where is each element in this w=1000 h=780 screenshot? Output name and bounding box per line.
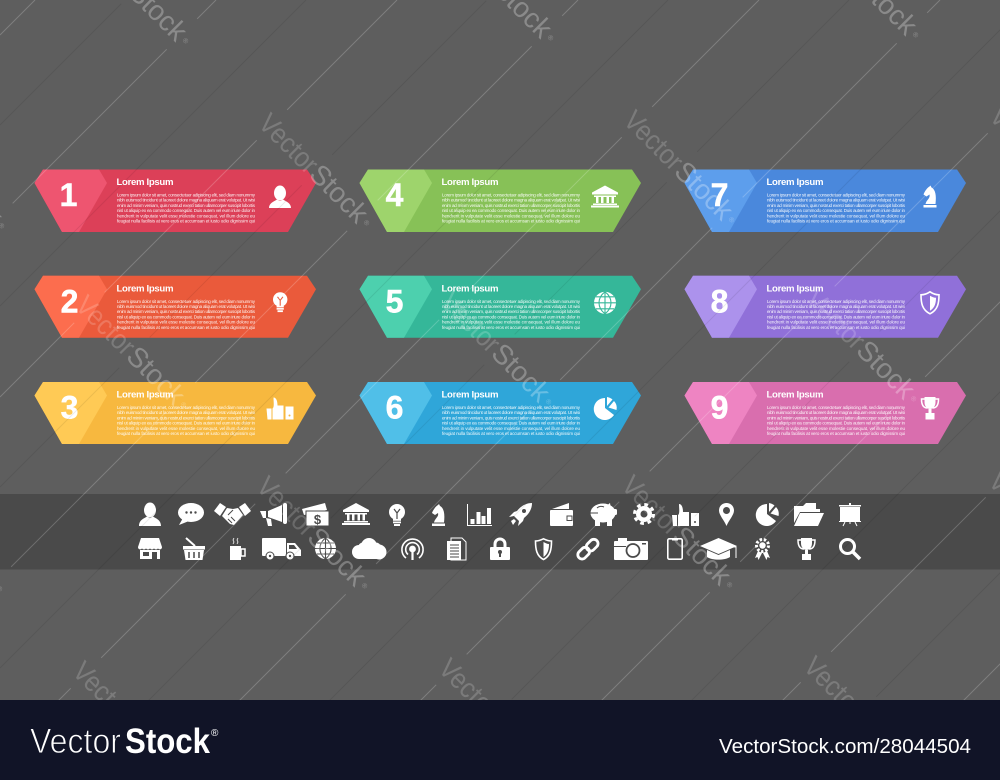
icon: banknotes <box>302 503 329 527</box>
card 7: 7 <box>711 177 728 213</box>
card 3: feugiat nulla facilisis at vero eros et accumsan et iusto odio dignissim qui <box>117 431 255 436</box>
icon: rocket <box>509 503 532 526</box>
card 8: enim ad minim veniam, quis nostrud exerci tation ullamcorper suscipit lobortis <box>767 309 906 314</box>
card 7 <box>684 170 966 232</box>
watermarks: ® <box>179 400 189 410</box>
card 8: Lorem Ipsum <box>766 283 824 294</box>
icon: light bulb <box>389 504 405 526</box>
card 9: nibh euismod tincidunt ut laoreet dolore magna aliquam erat volutpat. Ut wisi <box>767 410 905 415</box>
card 5: nibh euismod tincidunt ut laoreet dolore magna aliquam erat volutpat. Ut wisi <box>442 304 580 309</box>
watermarks: ® <box>544 397 554 407</box>
icon: award ribbon <box>755 540 770 560</box>
card 7: feugiat nulla facilisis at vero eros et accumsan et iusto odio dignissim qui <box>767 218 905 224</box>
card 5 <box>360 276 641 338</box>
watermarks: Stock <box>669 155 740 227</box>
footer banner <box>0 700 1000 780</box>
icon: magnifier <box>840 540 860 559</box>
card 9: 9 <box>711 390 728 426</box>
card 6: Lorem Ipsum <box>442 390 498 400</box>
card 9: feugiat nulla facilisis at vero eros et accumsan et iusto odio dignissim qui <box>767 431 905 436</box>
card 3: hendrerit in vulputate velit esse molestie consequat, vel illum dolore eu <box>117 426 255 431</box>
icon: thumbs up <box>672 504 699 526</box>
icon: banknotes: $ <box>314 512 322 527</box>
card 5: 5 <box>386 283 403 319</box>
card 1: nibh euismod tincidunt ut laoreet dolore magna aliquam erat volutpat. Ut wisi <box>117 198 255 203</box>
icon: delivery truck <box>262 538 301 560</box>
card 4: enim ad minim veniam, quis nostrud exerci tation ullamcorper suscipit lobortis <box>442 203 581 208</box>
watermarks: Stock <box>486 337 557 409</box>
card 3 <box>34 382 316 444</box>
icon: pie chart <box>594 397 617 420</box>
card 4: nibh euismod tincidunt ut laoreet dolore magna aliquam erat volutpat. Ut wisi <box>442 198 580 203</box>
icon: documents <box>447 538 466 560</box>
icon: megaphone <box>260 503 287 526</box>
icon: person <box>269 186 291 208</box>
card 9: enim ad minim veniam, quis nostrud exerci tation ullamcorper suscipit lobortis <box>767 415 906 420</box>
footer logo <box>30 722 219 761</box>
card 6: Lorem ipsum dolor sit amet, consectetuer adipiscing elit, sed diam nonummy <box>442 405 581 410</box>
card 8: feugiat nulla facilisis at vero eros et accumsan et iusto odio dignissim qui <box>767 325 905 330</box>
card 1: 1 <box>60 177 77 213</box>
card 5: enim ad minim veniam, quis nostrud exerci tation ullamcorper suscipit lobortis <box>442 309 581 314</box>
card 7: Lorem ipsum dolor sit amet, consectetuer adipiscing elit, sed diam nonummy <box>767 192 906 198</box>
card 6: hendrerit in vulputate velit esse molestie consequat, vel illum dolore eu <box>442 426 580 431</box>
icon: person <box>139 502 161 526</box>
card 8: Lorem ipsum dolor sit amet, consectetuer adipiscing elit, sed diam nonummy <box>767 299 906 304</box>
card 6: nibh euismod tincidunt ut laoreet dolore magna aliquam erat volutpat. Ut wisi <box>442 410 580 415</box>
icon band background <box>0 494 1000 570</box>
card 1: enim ad minim veniam, quis nostrud exerci tation ullamcorper suscipit lobortis <box>117 203 256 208</box>
icon: gear <box>634 504 654 524</box>
watermarks: Vector <box>433 652 505 724</box>
icon: handshake <box>214 503 251 525</box>
icon: wallet <box>550 503 573 526</box>
watermarks: Vector <box>67 655 139 727</box>
card 8: nibh euismod tincidunt ut laoreet dolore magna aliquam erat volutpat. Ut wisi <box>767 304 905 309</box>
footer logo: Stock <box>125 722 210 761</box>
icon: thumbs up <box>266 398 294 420</box>
icon: graduation cap <box>700 538 737 560</box>
card 7: nisl ut aliquip ex ea commodo consequat. Duis autem vel eum iriure dolor in <box>767 208 905 213</box>
watermarks: ® <box>362 218 372 228</box>
watermarks: Stock <box>121 340 192 412</box>
card 6: 6 <box>386 390 403 426</box>
watermarks: Stock <box>851 334 922 406</box>
icon: padlock <box>490 539 510 560</box>
card 7: hendrerit in vulputate velit esse molestie consequat, vel illum dolore eu <box>767 213 905 218</box>
card 4: feugiat nulla facilisis at vero eros et accumsan et iusto odio dignissim qui <box>442 218 580 224</box>
icon: pie chart <box>756 503 779 526</box>
icon: folder <box>794 503 824 526</box>
card 9: nisl ut aliquip ex ea commodo consequat. Duis autem vel eum iriure dolor in <box>767 421 905 426</box>
icon: trophy <box>922 397 938 420</box>
icon: chain link <box>576 538 600 561</box>
card 4: Lorem ipsum dolor sit amet, consectetuer adipiscing elit, sed diam nonummy <box>442 192 581 198</box>
watermarks: ® <box>181 36 191 46</box>
card 1: hendrerit in vulputate velit esse molestie consequat, vel illum dolore eu <box>117 213 255 218</box>
card 5: Lorem Ipsum <box>442 283 498 294</box>
watermarks: ® <box>725 580 735 590</box>
card 4: hendrerit in vulputate velit esse molestie consequat, vel illum dolore eu <box>442 213 580 218</box>
card 3: 3 <box>61 390 78 426</box>
card 9 <box>684 382 966 444</box>
card 2: feugiat nulla facilisis at vero eros et accumsan et iusto odio dignissim qui <box>117 325 255 330</box>
icon strip <box>138 502 861 561</box>
card 3: Lorem Ipsum <box>116 390 174 400</box>
card 2: Lorem ipsum dolor sit amet, consectetuer adipiscing elit, sed diam nonummy <box>117 299 256 304</box>
icon: chess knight <box>924 186 936 208</box>
card 9: Lorem Ipsum <box>766 390 824 400</box>
card 1 <box>34 170 316 232</box>
icon: cloud <box>352 538 386 560</box>
card 5: feugiat nulla facilisis at vero eros et accumsan et iusto odio dignissim qui <box>442 325 580 330</box>
footer image id: VectorStock.com/28044504 <box>719 736 971 758</box>
card 8 <box>684 276 966 338</box>
watermarks: Vector <box>618 104 690 176</box>
icon: camera <box>614 538 648 560</box>
icon: bank <box>342 503 370 525</box>
watermarks: ® <box>360 581 370 591</box>
card 9: hendrerit in vulputate velit esse molestie consequat, vel illum dolore eu <box>767 426 905 431</box>
icon: speech bubble <box>178 503 204 525</box>
watermarks: Vector <box>800 283 872 355</box>
card 2: 2 <box>61 283 78 319</box>
card 6: feugiat nulla facilisis at vero eros et accumsan et iusto odio dignissim qui <box>442 431 580 436</box>
watermarks: Stock <box>667 520 738 592</box>
watermarks: Stock <box>302 521 373 593</box>
card 1: feugiat nulla facilisis at vero eros et accumsan et iusto odio dignissim qui <box>117 218 255 224</box>
icon: trophy <box>798 538 815 560</box>
card 6: enim ad minim veniam, quis nostrud exerci tation ullamcorper suscipit lobortis <box>442 415 581 420</box>
icon: signal tower <box>402 539 423 560</box>
watermarks: ® <box>546 33 556 43</box>
card 8: hendrerit in vulputate velit esse molestie consequat, vel illum dolore eu <box>767 320 905 325</box>
card 7: nibh euismod tincidunt ut laoreet dolore magna aliquam erat volutpat. Ut wisi <box>767 198 905 203</box>
icon: bank <box>591 186 619 208</box>
card 2 <box>34 276 316 338</box>
icon: tablet <box>668 539 682 559</box>
icon: chess knight <box>432 504 445 526</box>
card 3: Lorem ipsum dolor sit amet, consectetuer adipiscing elit, sed diam nonummy <box>117 405 256 410</box>
card 6: nisl ut aliquip ex ea commodo consequat. Duis autem vel eum iriure dolor in <box>442 421 580 426</box>
watermarks: ® <box>727 215 737 225</box>
watermarks: ® <box>911 30 921 40</box>
watermarks: Vector <box>798 650 870 722</box>
watermarks: Vector <box>435 286 507 358</box>
card 9: Lorem ipsum dolor sit amet, consectetuer adipiscing elit, sed diam nonummy <box>767 405 906 410</box>
footer logo: Vector <box>30 722 121 761</box>
icon: shopping basket <box>183 538 205 560</box>
icon: coffee mug <box>230 538 245 560</box>
card 4: Lorem Ipsum <box>442 177 498 188</box>
card 4: nisl ut aliquip ex ea commodo consequat. Duis autem vel eum iriure dolor in <box>442 208 580 213</box>
card 2: nisl ut aliquip ex ea commodo consequat. Duis autem vel eum iriure dolor in <box>117 314 255 319</box>
icon: presentation board <box>839 503 861 526</box>
card 3: nisl ut aliquip ex ea commodo consequat. Duis autem vel eum iriure dolor in <box>117 421 255 426</box>
watermarks: Vector <box>70 289 142 361</box>
card 4: 4 <box>386 177 404 213</box>
card 1: Lorem Ipsum <box>116 177 174 188</box>
card 8: nisl ut aliquip ex ea commodo consequat. Duis autem vel eum iriure dolor in <box>767 314 905 319</box>
card 1: nisl ut aliquip ex ea commodo consequat. Duis autem vel eum iriure dolor in <box>117 208 255 213</box>
card 5: hendrerit in vulputate velit esse molestie consequat, vel illum dolore eu <box>442 320 580 325</box>
card 4 <box>360 170 641 232</box>
card 2: Lorem Ipsum <box>116 283 174 294</box>
card 1: Lorem ipsum dolor sit amet, consectetuer adipiscing elit, sed diam nonummy <box>117 192 256 198</box>
card 7: enim ad minim veniam, quis nostrud exerci tation ullamcorper suscipit lobortis <box>767 203 906 208</box>
watermarks: Vector <box>253 107 325 179</box>
icon: map pin <box>719 503 734 526</box>
icon: storefront <box>138 538 162 559</box>
icon: piggy bank <box>590 503 617 526</box>
card 6 <box>360 382 641 444</box>
card 2: nibh euismod tincidunt ut laoreet dolore magna aliquam erat volutpat. Ut wisi <box>117 304 255 309</box>
icon: shield <box>536 539 552 560</box>
card 2: enim ad minim veniam, quis nostrud exerci tation ullamcorper suscipit lobortis <box>117 309 256 314</box>
watermarks: Stock <box>304 158 375 230</box>
card 7: Lorem Ipsum <box>766 177 824 188</box>
card 8: 8 <box>711 283 728 319</box>
icon: light bulb <box>273 292 287 312</box>
icon: globe <box>594 292 616 314</box>
icon: globe <box>315 538 336 559</box>
card 3: nibh euismod tincidunt ut laoreet dolore magna aliquam erat volutpat. Ut wisi <box>117 410 255 415</box>
card 2: hendrerit in vulputate velit esse molestie consequat, vel illum dolore eu <box>117 320 255 325</box>
footer logo: ® <box>211 728 219 739</box>
watermarks: ® <box>909 394 919 404</box>
icon: bar chart <box>468 504 492 526</box>
watermarks: Vector <box>616 469 688 541</box>
icon: shield <box>921 292 939 314</box>
card 5: nisl ut aliquip ex ea commodo consequat. Duis autem vel eum iriure dolor in <box>442 314 580 319</box>
watermarks: Vector <box>251 470 323 542</box>
card 3: enim ad minim veniam, quis nostrud exerci tation ullamcorper suscipit lobortis <box>117 415 256 420</box>
card 5: Lorem ipsum dolor sit amet, consectetuer adipiscing elit, sed diam nonummy <box>442 299 581 304</box>
